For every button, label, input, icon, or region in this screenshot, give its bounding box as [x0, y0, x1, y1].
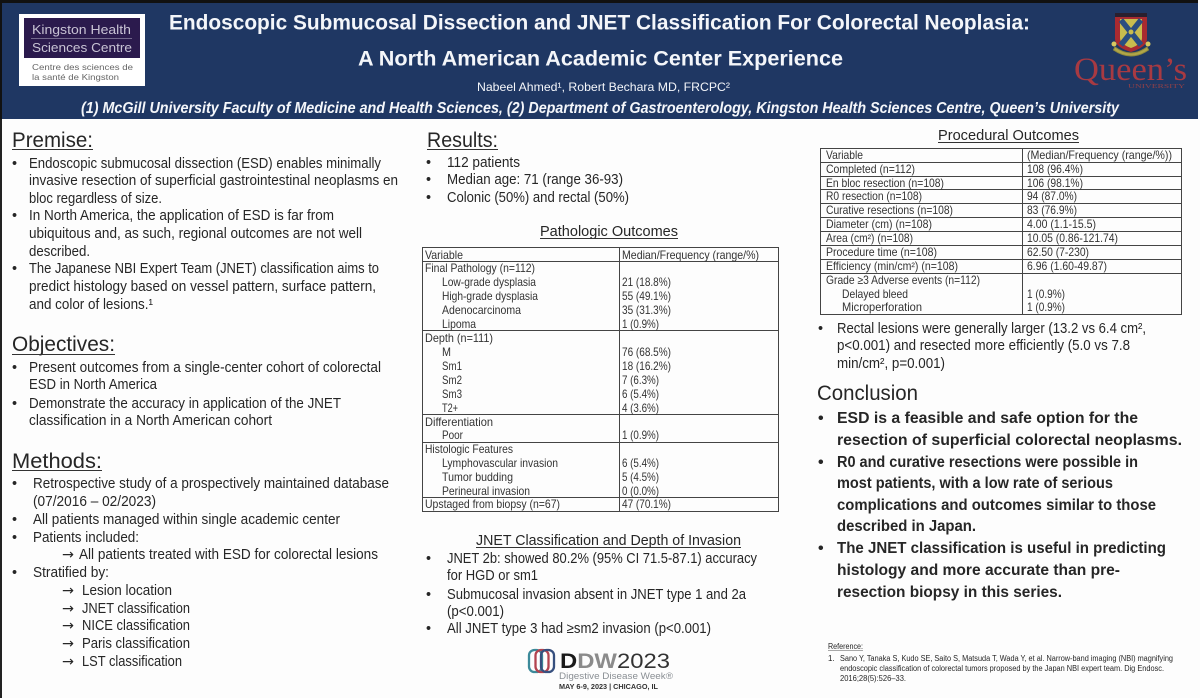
logo: Kingston Health Sciences Centre: Kingston Health [32, 23, 131, 37]
table: procedural outcomes: Efficiency (min/cm²) (n=108) [826, 260, 958, 273]
logo: Queen's University: UNIVERSITY [1128, 83, 1185, 90]
text block: premise bullets: ubiquitous and, as such, regional outcomes are not well [29, 226, 362, 242]
text block: objectives bullets: Demonstrate the accuracy in application of the JNET [29, 396, 341, 412]
table: procedural outcomes: Diameter (cm) (n=108) [826, 218, 932, 231]
table: pathologic outcomes: Sm3 [442, 388, 462, 401]
logo: DDW 2023 [529, 650, 673, 691]
text block: results bullets: Colonic (50%) and rectal (50%) [447, 190, 629, 206]
text block: reference: Reference: [828, 642, 863, 651]
table: pathologic outcomes [422, 248, 778, 512]
heading: JNET Classification and Depth of Invasion: JNET Classification and Depth of Invasion [476, 533, 741, 549]
table: pathologic outcomes: 5 (4.5%) [622, 471, 659, 484]
logo: Kingston Health Sciences Centre: la santé de Kingston [32, 73, 120, 82]
table: procedural outcomes: 1 (0.9%) [1027, 288, 1065, 301]
table: pathologic outcomes: 47 (70.1%) [622, 498, 671, 511]
logo: DDW 2023: MAY 6-9, 2023 | CHICAGO, IL [559, 684, 659, 691]
text block: methods bullets: → [62, 618, 74, 634]
text block: methods bullets: NICE classification [82, 618, 190, 634]
text block: conclusion bullets: resection biopsy in this series. [837, 584, 1062, 601]
table: procedural outcomes: 1 (0.9%) [1027, 301, 1065, 314]
table: pathologic outcomes: Differentiation [425, 416, 493, 429]
text block: JNET bullets: (p<0.001) [447, 604, 504, 620]
text block: premise bullets: The Japanese NBI Expert Team (JNET) classification aims to [29, 261, 379, 277]
text block: methods bullets: JNET classification [82, 601, 190, 617]
text block: premise bullets: Endoscopic submucosal dissection (ESD) enables minimally [29, 156, 382, 172]
heading: Premise: Premise: [12, 128, 93, 152]
table: pathologic outcomes: 76 (68.5%) [622, 346, 671, 359]
heading: Conclusion: Conclusion [817, 381, 918, 405]
table: pathologic outcomes: 4 (3.6%) [622, 402, 659, 415]
logo: Queen's University: Queen’s [1074, 52, 1187, 88]
logo: Kingston Health Sciences Centre [19, 14, 145, 86]
table: procedural outcomes: En bloc resection (n=108) [826, 177, 944, 190]
text block: results bullets [426, 155, 629, 206]
title: A North American Academic Center Experience [358, 48, 843, 70]
title: Endoscopic Submucosal Dissection and JNET Classification For Colorectal Neoplasia: [169, 12, 1030, 34]
text block: objectives bullets [12, 360, 381, 429]
text block: methods bullets: All patients managed within single academic center [33, 512, 340, 528]
table: procedural outcomes: 10.05 (0.86-121.74) [1027, 232, 1118, 245]
table: pathologic outcomes: Histologic Features [425, 443, 513, 456]
text block: JNET bullets: All JNET type 3 had ≥sm2 invasion (p<0.001) [447, 621, 711, 637]
table: pathologic outcomes: Sm1 [442, 360, 462, 373]
text block: methods bullets: → [62, 601, 74, 617]
table: pathologic outcomes: Variable [425, 249, 463, 262]
table: procedural outcomes: 106 (98.1%) [1027, 177, 1083, 190]
table: procedural outcomes: Variable [826, 149, 863, 162]
table: pathologic outcomes: Low-grade dysplasia [442, 276, 536, 289]
panel: left column [12, 128, 398, 670]
table: pathologic outcomes: 6 (5.4%) [622, 388, 659, 401]
text block: premise bullets: invasive resection of superficial gastrointestinal neoplasms en [29, 173, 398, 189]
table: pathologic outcomes: Lipoma [442, 318, 476, 331]
text block: results bullets: • [426, 155, 431, 171]
text block: rectal lesions bullet: • [818, 321, 823, 337]
text block: conclusion bullets: described in Japan. [837, 518, 976, 535]
text block: objectives bullets: Present outcomes from a single-center cohort of colorectal [29, 360, 381, 376]
logo: Kingston Health Sciences Centre: Centre des sciences de [32, 63, 134, 72]
table: pathologic outcomes: 7 (6.3%) [622, 374, 659, 387]
text block: methods bullets [12, 476, 389, 670]
table: pathologic outcomes: 6 (5.4%) [622, 457, 659, 470]
table: pathologic outcomes: High-grade dysplasia [442, 290, 538, 303]
text block: conclusion bullets: R0 and curative resections were possible in [837, 454, 1138, 471]
text block: methods bullets: LST classification [82, 654, 182, 670]
table: pathologic outcomes: 1 (0.9%) [622, 429, 659, 442]
text block: premise bullets: described. [29, 244, 90, 260]
text block: results bullets: • [426, 190, 431, 206]
text block: objectives bullets: ESD in North America [29, 377, 157, 393]
text block: methods bullets: Paris classification [82, 636, 190, 652]
table: procedural outcomes: Curative resections (n=108) [826, 204, 953, 217]
table: procedural outcomes: 94 (87.0%) [1027, 190, 1077, 203]
table: pathologic outcomes: Final Pathology (n=112) [425, 262, 535, 275]
text block: premise bullets: • [12, 208, 17, 224]
text block: objectives bullets: classification in a North American cohort [29, 413, 272, 429]
logo: Queen's University [1074, 13, 1187, 90]
text block: methods bullets: → [62, 583, 74, 599]
text block: JNET bullets: • [426, 587, 431, 603]
table: pathologic outcomes: Lymphovascular invasion [442, 457, 558, 470]
logo: DDW 2023: Digestive Disease Week® [559, 671, 673, 681]
heading: Results: Results: [427, 128, 498, 152]
text block: JNET bullets [426, 551, 758, 637]
text block: methods bullets: • [12, 512, 17, 528]
table: procedural outcomes: Completed (n=112) [826, 163, 915, 176]
table: pathologic outcomes: Perineural invasion [442, 485, 530, 498]
table: pathologic outcomes: T2+ [442, 402, 458, 415]
text block: JNET bullets: JNET 2b: showed 80.2% (95% CI 71.5-87.1) accuracy [447, 551, 758, 567]
text block: methods bullets: → [62, 547, 74, 563]
text block: reference: endoscopic classification of colorectal tumors proposed by the Japan NBI expert team. Dig Endosc. [840, 664, 1164, 673]
table: pathologic outcomes: 35 (31.3%) [622, 304, 671, 317]
text block: rectal lesions bullet: p<0.001) and resected more efficiently (5.0 vs 7.8 [837, 338, 1130, 354]
text block: conclusion bullets: • [818, 540, 824, 557]
text block: premise bullets: predict histology based on vessel pattern, surface pattern, [29, 279, 376, 295]
text block: reference: 1. [828, 654, 835, 663]
table: pathologic outcomes: 55 (49.1%) [622, 290, 671, 303]
table: procedural outcomes: 83 (76.9%) [1027, 204, 1077, 217]
text block: premise bullets: and color of lesions.¹ [29, 297, 153, 313]
text block: methods bullets: • [12, 565, 17, 581]
panel: middle column [422, 128, 778, 691]
text block: methods bullets: (07/2016 – 02/2023) [33, 494, 156, 510]
table: procedural outcomes: Area (cm²) (n=108) [826, 232, 913, 245]
text block: methods bullets: Patients included: [33, 530, 139, 546]
text block: conclusion bullets: ESD is a feasible and safe option for the [837, 410, 1138, 427]
icon: crest [1112, 13, 1150, 56]
table: procedural outcomes: Delayed bleed [842, 288, 908, 301]
text block: conclusion bullets: complications and outcomes similar to those [837, 497, 1156, 514]
text block: results bullets: 112 patients [447, 155, 520, 171]
text block: results bullets: Median age: 71 (range 36-93) [447, 172, 623, 188]
heading: Methods: Methods: [12, 449, 102, 473]
table: pathologic outcomes: 0 (0.0%) [622, 485, 659, 498]
text block: rectal lesions bullet: min/cm², p=0.001) [837, 356, 945, 372]
text block: JNET bullets: for HGD or sm1 [447, 568, 538, 584]
text block: methods bullets: → [62, 654, 74, 670]
panel: right column [817, 128, 1182, 683]
text block: conclusion bullets: The JNET classification is useful in predicting [837, 540, 1166, 557]
table: procedural outcomes: Procedure time (n=108) [826, 246, 937, 259]
text block: premise bullets: • [12, 261, 17, 277]
text block: methods bullets: → [62, 636, 74, 652]
text block: conclusion bullets: most patients, with a low rate of serious [837, 475, 1113, 492]
heading: Pathologic Outcomes: Pathologic Outcomes [540, 224, 678, 240]
text block: reference [828, 642, 1173, 683]
text block: rectal lesions bullet: Rectal lesions were generally larger (13.2 vs 6.4 cm², [837, 321, 1146, 337]
text block: premise bullets: bloc regardless of size. [29, 191, 162, 207]
icon: DDW linked rings [529, 650, 554, 672]
text block: JNET bullets: • [426, 621, 431, 637]
table: pathologic outcomes: 1 (0.9%) [622, 318, 659, 331]
text block: JNET bullets: • [426, 551, 431, 567]
authors: Nabeel Ahmed¹, Robert Bechara MD, FRCPC² [477, 80, 730, 94]
text block: methods bullets: All patients treated with ESD for colorectal lesions [79, 547, 378, 563]
table: pathologic outcomes: M [442, 346, 451, 359]
table: procedural outcomes: 62.50 (7-230) [1027, 246, 1089, 259]
table: procedural outcomes [820, 148, 1182, 314]
text block: premise bullets: In North America, the application of ESD is far from [29, 208, 334, 224]
text block: rectal lesions bullet [818, 321, 1146, 372]
table: pathologic outcomes: Sm2 [442, 374, 462, 387]
table: pathologic outcomes: Tumor budding [442, 471, 513, 484]
heading: Procedural Outcomes: Procedural Outcomes [938, 128, 1079, 144]
table: pathologic outcomes: Median/Frequency (range/%) [622, 249, 759, 262]
table: pathologic outcomes: Upstaged from biopsy (n=67) [425, 498, 560, 511]
table: procedural outcomes: R0 resection (n=108) [826, 190, 922, 203]
text block: methods bullets: Stratified by: [33, 565, 109, 581]
table: procedural outcomes: 4.00 (1.1-15.5) [1027, 218, 1096, 231]
header banner [0, 0, 1198, 119]
table: pathologic outcomes: 18 (16.2%) [622, 360, 671, 373]
text block: reference: Sano Y, Tanaka S, Kudo SE, Saito S, Matsuda T, Wada Y, et al. Narrow-band imaging (NBI) magnifying [840, 654, 1173, 663]
text block: conclusion bullets: histology and more accurate than pre- [837, 562, 1120, 579]
text block: reference: 2016;28(5):526–33. [840, 674, 906, 683]
table: procedural outcomes: (Median/Frequency (range/%)) [1027, 149, 1172, 162]
text block: results bullets: • [426, 172, 431, 188]
text block: methods bullets: • [12, 476, 17, 492]
table: procedural outcomes: Microperforation [842, 301, 922, 314]
text block: objectives bullets: • [12, 360, 17, 376]
text block: conclusion bullets [818, 410, 1182, 601]
text block: methods bullets: Retrospective study of a prospectively maintained database [33, 476, 389, 492]
text block: JNET bullets: Submucosal invasion absent in JNET type 1 and 2a [447, 587, 746, 603]
table: procedural outcomes: Grade ≥3 Adverse events (n=112) [826, 274, 980, 287]
logo: Kingston Health Sciences Centre: Sciences Centre [32, 41, 132, 55]
text block: premise bullets [12, 156, 398, 313]
text block: methods bullets: • [12, 530, 17, 546]
text block: conclusion bullets: • [818, 454, 824, 471]
table: procedural outcomes: 108 (96.4%) [1027, 163, 1083, 176]
text block: conclusion bullets: • [818, 410, 824, 427]
table: pathologic outcomes: Poor [442, 429, 463, 442]
heading: Objectives: Objectives: [12, 332, 115, 356]
table: pathologic outcomes: Depth (n=111) [425, 332, 493, 345]
text block: conclusion bullets: resection of superficial colorectal neoplasms. [837, 432, 1182, 449]
text block: objectives bullets: • [12, 396, 17, 412]
text block: methods bullets: Lesion location [82, 583, 172, 599]
title [169, 12, 1030, 70]
logo: DDW 2023: DDW2023 [560, 650, 670, 673]
affiliations: (1) McGill University Faculty of Medicine and Health Sciences, (2) Department of Gastroenterology, Kingston Health Sciences Centre, Queen’s University [81, 100, 1120, 117]
table: pathologic outcomes: 21 (18.8%) [622, 276, 671, 289]
table: pathologic outcomes: Adenocarcinoma [442, 304, 521, 317]
table: procedural outcomes: 6.96 (1.60-49.87) [1027, 260, 1107, 273]
text block: premise bullets: • [12, 156, 17, 172]
